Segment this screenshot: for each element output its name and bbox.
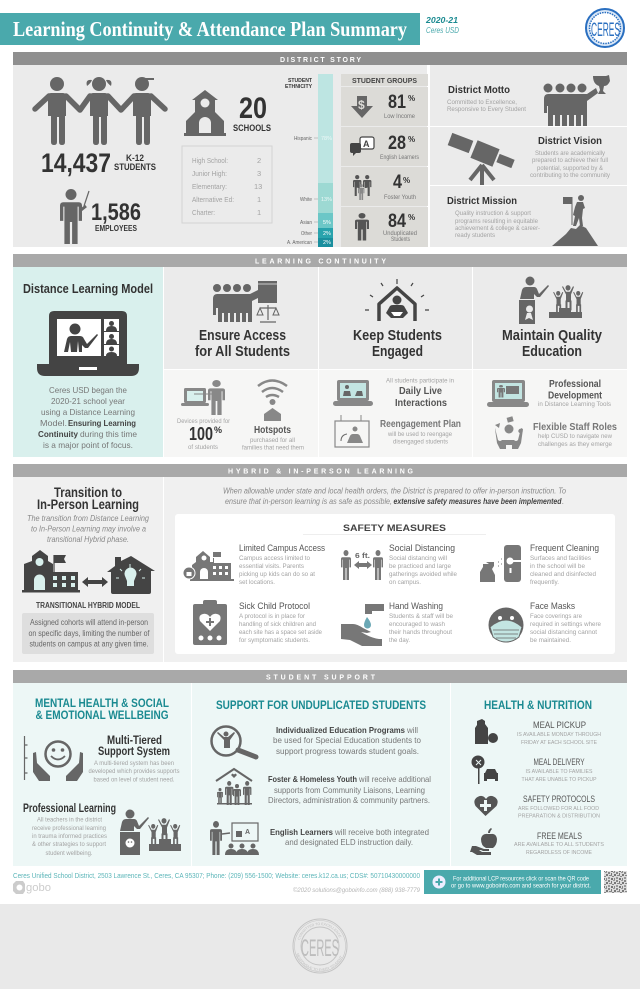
text: individualized education programs: will (406, 725, 418, 735)
section: learning continuity (13, 254, 627, 457)
bottom Ceres seal: COMMITTED TO EXCELLENCE (298, 922, 342, 940)
bottom Ceres seal: CERES (301, 935, 339, 962)
icon: school to home (22, 550, 155, 594)
text: individualized education programs: support progress towards student goals. (276, 746, 419, 756)
icon: students with book and scales (210, 281, 279, 322)
measure: frequent cleaning: frequently. (530, 579, 559, 586)
icon: telescope (450, 139, 513, 185)
panel: student groups: STUDENT GROUPS (352, 78, 417, 85)
item: free meals: FREE MEALS (537, 831, 582, 841)
measure: limited campus access: set locations. (239, 579, 275, 586)
measure: hand washing: their hands throughout (389, 629, 452, 636)
section heading: learning continuity (13, 254, 627, 267)
stat: english learners: % (408, 135, 415, 144)
school type table: Elementary: (192, 182, 227, 191)
chart: student ethnicity stacked bar: 2% (323, 231, 331, 237)
panel: transition to in-person: The transition from Distance Learning (27, 514, 149, 523)
stat: students: STUDENTS (114, 162, 156, 172)
text: multi-tiered support system: Multi-Tiered (107, 733, 162, 747)
measure: frequent cleaning: in the school will be (530, 563, 585, 570)
item: free meals (470, 828, 604, 856)
gobo logo: gobo (26, 882, 51, 894)
text: intro: ensure that in-person learning is as safe as possible, (225, 497, 392, 506)
icon: teacher with english board (210, 821, 259, 855)
text: professional development: Development (548, 390, 602, 402)
chart: student ethnicity stacked bar: ETHNICITY (285, 84, 312, 90)
measure: face masks: be maintained. (530, 637, 571, 644)
measure: sick child protocol: handling of sick children and (239, 621, 316, 628)
panel: district motto: Responsive to Every Student (447, 106, 526, 113)
text: flexible staff roles: help CUSD to navigate new (538, 433, 612, 440)
text: multi-tiered support system: based on level of student need. (94, 776, 175, 784)
footer address: Ceres Unified School District, 2503 Lawrence St., Ceres, CA 95307; Phone: (209) 556-1500; Website: ceres.k12.ca.us; CDS#: 50710430000000 (13, 871, 420, 880)
section heading: district story: DISTRICT STORY (280, 57, 361, 64)
measure: frequent cleaning (480, 543, 599, 586)
measure: sick child protocol: A protocol is in place for (239, 613, 306, 620)
text: reengagement plan: disengaged students (393, 438, 449, 446)
callout: hybrid model description (22, 613, 154, 654)
item: meal pickup: MEAL PICKUP (533, 720, 586, 730)
panel: district vision: District Vision (538, 135, 602, 147)
text: foster and homeless youth (268, 774, 431, 805)
section heading: hybrid (13, 464, 627, 477)
measure: social distancing (341, 543, 457, 586)
stat: foster youth: Foster Youth (384, 194, 416, 201)
stat: foster youth: 4 (393, 172, 402, 193)
text: distance learning description: Ceres USD began the (49, 385, 127, 395)
text: intro (223, 486, 566, 506)
text: multi-tiered support system (88, 733, 180, 784)
copyright: ©2020 solutions@goboinfo.com (888) 938-7779 (293, 887, 421, 894)
text: distance learning description: Model. (40, 418, 67, 428)
panel: maintain quality education (473, 267, 627, 369)
item: meal pickup: FRIDAY AT EACH SCHOOL SITE (521, 740, 597, 746)
measure: social distancing: on campus. (389, 579, 421, 586)
panel: district mission: achievement & college & career- (455, 225, 540, 232)
text: professional learning: receive professional learning (32, 825, 106, 832)
callout: hybrid model description: students on campus at any given time. (30, 640, 148, 648)
measure: frequent cleaning: Frequent Cleaning (530, 543, 599, 554)
stat: low income (351, 92, 415, 120)
stat: english learners (350, 133, 420, 161)
stat: devices (177, 418, 231, 451)
icon: climber on mountain (552, 195, 598, 246)
section: district story (13, 52, 627, 247)
text: english learners: will receive both integrated (334, 827, 429, 837)
measure: limited campus access (183, 543, 325, 586)
text: english learners: and designated ELD instruction daily. (285, 837, 413, 847)
section heading: student support (13, 670, 627, 683)
stat: devices: 100 (189, 424, 213, 444)
callout: additional resources (424, 870, 601, 894)
item: meal delivery: MEAL DELIVERY (534, 757, 584, 767)
panel: maintain quality education: Maintain Quality (502, 327, 603, 344)
panel: district vision: potential, supported by & (537, 165, 604, 172)
stat: schools: 20 (239, 92, 267, 125)
text: individualized education programs: be used for Special Education students to (273, 735, 421, 745)
stat: foster youth (353, 172, 416, 201)
callout: additional resources: or go to www.goboinfo.com and search for your district. (451, 882, 591, 890)
text: professional learning (23, 803, 116, 857)
section heading: hybrid: HYBRID & IN-PERSON LEARNING (228, 468, 414, 476)
school type table: 1 (257, 195, 261, 204)
measure: social distancing: Social distancing will (389, 555, 448, 562)
callout: hybrid model description: Assigned cohorts will attend in-person (30, 618, 148, 627)
chart: student ethnicity stacked bar (285, 74, 333, 247)
school type table: Alternative Ed: (192, 195, 234, 204)
school type table: Charter: (192, 208, 215, 217)
icon: teacher with students and podium (120, 810, 181, 855)
measure: limited campus access: Campus access limited to (239, 555, 310, 562)
measure: social distancing: Social Distancing (389, 543, 455, 554)
text: intro: extensive safety measures have been implemented (394, 497, 562, 506)
stat: english learners: English Learners (380, 154, 420, 161)
school type table: 3 (257, 169, 261, 178)
bottom Ceres seal (292, 918, 348, 974)
measure: hand washing: encouraged to wash (389, 621, 445, 628)
text: professional learning: in trauma informed practices (32, 833, 108, 840)
chart: student ethnicity stacked bar: 78% (321, 136, 332, 142)
text: professional development: Professional (549, 378, 601, 390)
chart: student ethnicity stacked bar: Other (301, 231, 312, 237)
stat: low income: $ (358, 98, 365, 112)
icon: teacher with english board: A (245, 829, 250, 836)
text: hotspots: families that need them (242, 444, 304, 452)
item: safety protocols (474, 794, 600, 820)
chart: student ethnicity stacked bar: 5% (323, 220, 331, 226)
text: reengagement plan: will be used to reengage (387, 431, 452, 438)
stat: devices: of students (188, 444, 219, 451)
text: multi-tiered support system: A multi-tiered system has been (94, 760, 174, 767)
measure: hand washing: the day. (389, 637, 410, 644)
panel: district mission (430, 186, 627, 247)
text: professional learning: student wellbeing. (46, 850, 93, 857)
panel: support for unduplicated students (192, 683, 450, 866)
panel: transition to in-person: to In-Person Learning may involve a (31, 524, 146, 534)
callout: hybrid model description: on specific days, limiting the number of (28, 629, 150, 638)
title banner (0, 13, 420, 45)
stat: english learners: 28 (388, 133, 406, 154)
footer grey band (0, 904, 640, 989)
text: hotspots: purchased for all (250, 437, 296, 444)
panel: student groups (341, 74, 428, 247)
item: safety protocols: PREPARATION & DISTRIBUTION (518, 814, 600, 820)
text: professional learning: Professional Learning (23, 803, 116, 815)
measure: hand washing: Hand Washing (389, 601, 443, 612)
text: foster and homeless youth: supports from Community Liaisons, Learning (274, 785, 425, 795)
panel: district mission: programs resulting in equitable (455, 218, 538, 225)
gobo logo (13, 881, 51, 894)
year and district (425, 15, 459, 35)
text: english learners: English Learners (270, 827, 333, 837)
text: foster and homeless youth: Foster & Homeless Youth (268, 774, 357, 784)
stat: unduplicated students: 84 (388, 211, 406, 232)
icon: magnifier over wheelchair student (212, 726, 256, 757)
icon: juggling staff (495, 416, 523, 449)
text: distance learning description (38, 385, 137, 450)
stat: employees: EMPLOYEES (95, 224, 138, 233)
text: distance learning description: using a Distance Learning (41, 407, 135, 417)
panel: transition to in-person (13, 477, 163, 662)
measure: frequent cleaning: cleaned and disinfected (530, 571, 596, 578)
panel: transition to in-person: TRANSITIONAL HYBRID MODEL (36, 601, 140, 610)
stat: students: K-12 (126, 153, 144, 163)
chart: student ethnicity stacked bar: 13% (321, 197, 332, 203)
text: intro: . (562, 497, 564, 506)
stat: devices: Devices provided for (177, 418, 231, 425)
panel: district vision: contributing to the community (530, 172, 611, 179)
text: hotspots (242, 425, 304, 452)
panel: mental health: MENTAL HEALTH & SOCIAL (35, 698, 169, 710)
text: professional learning: All teachers in the district (37, 816, 102, 824)
measure: hand washing (341, 601, 453, 646)
school type table: 13 (254, 182, 262, 191)
text: distance learning description: Continuity (38, 429, 78, 439)
stat: low income: Low Income (384, 113, 415, 120)
header (0, 8, 625, 48)
panel: district mission: ready students (455, 232, 496, 239)
item: safety protocols: SAFETY PROTOCOLS (523, 794, 595, 804)
text: distance learning description: Ensuring Learning (68, 418, 136, 428)
panel: district vision (430, 127, 627, 185)
item: free meals: ARE AVAILABLE TO ALL STUDENTS (514, 842, 604, 848)
stat: employees: 1,586 (91, 199, 141, 226)
chart: student ethnicity stacked bar: 2% (323, 240, 331, 246)
icon: student in house (365, 279, 429, 321)
panel: district mission: District Mission (447, 195, 517, 207)
year and district: Ceres USD (426, 26, 459, 35)
footer (13, 870, 627, 974)
stat: low income: % (408, 94, 415, 103)
icon: three children holding hands (35, 77, 165, 145)
text: reengagement plan: Reengagement Plan (380, 418, 461, 430)
measure: sick child protocol (193, 600, 322, 645)
icon: laptop training (487, 380, 529, 407)
school type table (182, 146, 272, 223)
stat: unduplicated students (355, 211, 417, 243)
icon: team with trophy (541, 75, 610, 126)
icon: Ceres logo (585, 8, 625, 48)
measure: frequent cleaning: Surfaces and facilities (530, 555, 592, 562)
school type table: 1 (257, 208, 261, 217)
school type table: 2 (257, 156, 261, 165)
text: multi-tiered support system: Support System (98, 744, 170, 758)
panel: distance learning model (13, 267, 163, 457)
text: distance learning description: 2020-21 school year (51, 396, 125, 406)
icon: wifi hotspot (258, 380, 287, 421)
QR code (604, 871, 627, 893)
icon: family in home (216, 769, 252, 805)
panel: safety measures card (175, 514, 615, 654)
chart: student ethnicity stacked bar: A. American (287, 240, 312, 246)
panel: support for unduplicated students: SUPPORT FOR UNDUPLICATED STUDENTS (216, 698, 426, 712)
text: foster and homeless youth: Directors, administration & community partners. (268, 795, 430, 805)
panel: safety (164, 477, 627, 662)
stat: schools (233, 92, 271, 134)
text: daily live interactions (386, 378, 454, 409)
text: professional learning: & other strategies to support (32, 841, 106, 848)
item: meal pickup (475, 719, 601, 746)
measure: social distancing: gatherings avoided while (389, 571, 457, 578)
measure: face masks: social distancing cannot (530, 629, 597, 636)
text: individualized education programs: Individualized Education Programs (276, 725, 405, 735)
measure: sick child protocol: Sick Child Protocol (239, 601, 310, 612)
item: meal delivery: IS AVAILABLE TO FAMILIES (526, 769, 593, 775)
panel: quality details (473, 370, 627, 457)
measure: sick child protocol: each site has a space set aside (239, 629, 322, 636)
stat: low income: 81 (388, 92, 406, 113)
text: daily live interactions: Daily Live (399, 385, 442, 397)
text: individualized education programs (273, 725, 421, 756)
panel: district motto: District Motto (448, 84, 510, 96)
item: meal delivery (472, 756, 597, 784)
panel: transition to in-person: Transition to (54, 485, 122, 500)
icon: employee (60, 189, 89, 244)
item: meal delivery: THAT ARE UNABLE TO PICKUP (522, 777, 597, 783)
measure: face masks: Face coverings are (530, 613, 582, 620)
item: safety protocols: ARE FOLLOWED FOR ALL FOOD (518, 806, 599, 812)
panel: distance learning model: Distance Learning Model (23, 282, 153, 296)
item: meal pickup: IS AVAILABLE MONDAY THROUGH (517, 732, 601, 738)
icon: school (184, 90, 226, 136)
stat: students: 14,437 (41, 148, 111, 178)
section heading: district story (13, 52, 627, 65)
panel: access details (164, 370, 318, 457)
panel: district motto (430, 65, 627, 126)
panel: ensure access: Ensure Access (199, 327, 286, 344)
year and district: 2020-21 (425, 15, 458, 25)
measure: face masks: required in settings where (530, 621, 601, 628)
panel: safety measures card: SAFETY MEASURES (343, 523, 446, 534)
school type table: High School: (192, 156, 228, 165)
icon: laptop live class (333, 380, 373, 406)
text: distance learning description: during this time (80, 429, 137, 439)
text: flexible staff roles (533, 421, 617, 448)
panel: engagement details (319, 370, 472, 457)
text: distance learning description: is a major point of focus. (43, 440, 133, 450)
panel: keep students engaged: Engaged (372, 343, 423, 360)
panel: district vision: Students are academically (535, 150, 606, 157)
chart: student ethnicity stacked bar: STUDENT (288, 78, 313, 84)
panel: ensure access: for All Students (195, 343, 290, 360)
measure: social distancing: be practiced and large (389, 563, 451, 570)
stat: unduplicated students: % (408, 213, 415, 222)
measure: hand washing: Students & staff will be (389, 613, 453, 620)
panel: maintain quality education: Education (522, 343, 582, 360)
measure: limited campus access: picking up kids can do so at (239, 571, 315, 578)
text: intro: When allowable under state and local health orders, the District is prepared to offer in-person instruction. To (223, 486, 566, 496)
chart: student ethnicity stacked bar: Asian (300, 220, 312, 226)
text: daily live interactions: All students participate in (386, 378, 454, 385)
panel: health and nutrition: HEALTH & NUTRITION (484, 698, 592, 712)
panel: district motto: Committed to Excellence, (447, 99, 517, 106)
text: reengagement plan (380, 418, 461, 446)
text: flexible staff roles: challenges as they emerge (538, 441, 612, 448)
panel: health and nutrition (451, 683, 627, 866)
stat: foster youth: % (403, 176, 410, 185)
panel: ensure access (164, 267, 318, 369)
icon: scale and smiling face in hands (24, 736, 83, 781)
section heading: student support: STUDENT SUPPORT (266, 674, 376, 682)
item: free meals: REGARDLESS OF INCOME (526, 850, 592, 856)
icon: reengagement board (335, 415, 369, 447)
text: foster and homeless youth: will receive additional (358, 774, 431, 784)
section heading: learning continuity: LEARNING CONTINUITY (255, 258, 386, 266)
school type table: Junior High: (192, 169, 227, 178)
panel: mental health: & EMOTIONAL WELLBEING (36, 710, 169, 722)
measure: social distancing: 6 ft. (355, 551, 370, 560)
measure: face masks (488, 601, 601, 644)
bottom Ceres seal: RESPONSIVE TO EVERY STUDENT (296, 953, 342, 971)
stat: schools: SCHOOLS (233, 123, 271, 134)
panel: mental health (13, 683, 191, 866)
panel: district vision: prepared to achieve their full (532, 157, 609, 164)
measure: limited campus access: Limited Campus Access (239, 543, 325, 554)
panel: transition to in-person: transitional Hybrid phase. (47, 535, 129, 544)
stat: devices: % (214, 425, 222, 435)
measure: face masks: Face Masks (530, 601, 575, 612)
chart: student ethnicity stacked bar: White (300, 197, 312, 203)
measure: sick child protocol: for symptomatic students. (239, 637, 310, 644)
text: daily live interactions: Interactions (395, 397, 447, 409)
text: english learners (270, 827, 429, 847)
panel: keep students engaged: Keep Students (353, 327, 442, 344)
text: professional development (538, 378, 612, 408)
text: professional development: in Distance Learning Tools (538, 401, 612, 408)
stat: english learners: A (363, 139, 370, 149)
section: hybrid and in-person learning (13, 464, 627, 662)
chart: student ethnicity stacked bar: Hispanic (294, 136, 312, 142)
panel: transition to in-person: In-Person Learning (37, 497, 139, 512)
icon: laptop with teacher (37, 311, 139, 376)
text: hotspots: Hotspots (254, 425, 291, 436)
icon: device and person (181, 380, 225, 415)
stat: unduplicated students: Students (391, 236, 411, 243)
stat: unduplicated students: Unduplicated (383, 230, 417, 237)
icon: teacher at podium with students (519, 276, 583, 324)
callout: additional resources: For additional LCP resources click or scan the QR code (453, 876, 589, 882)
panel: district mission: Quality instruction & support (455, 210, 531, 217)
text: multi-tiered support system: developed which provides supports (88, 768, 180, 775)
text: flexible staff roles: Flexible Staff Roles (533, 421, 617, 433)
section: student support (13, 670, 627, 866)
measure: limited campus access: essential visits. Parents (239, 563, 305, 570)
stat: employees (91, 199, 141, 233)
panel: keep students engaged (319, 267, 472, 369)
title banner: Learning Continuity & Attendance Plan Summary (13, 17, 407, 41)
